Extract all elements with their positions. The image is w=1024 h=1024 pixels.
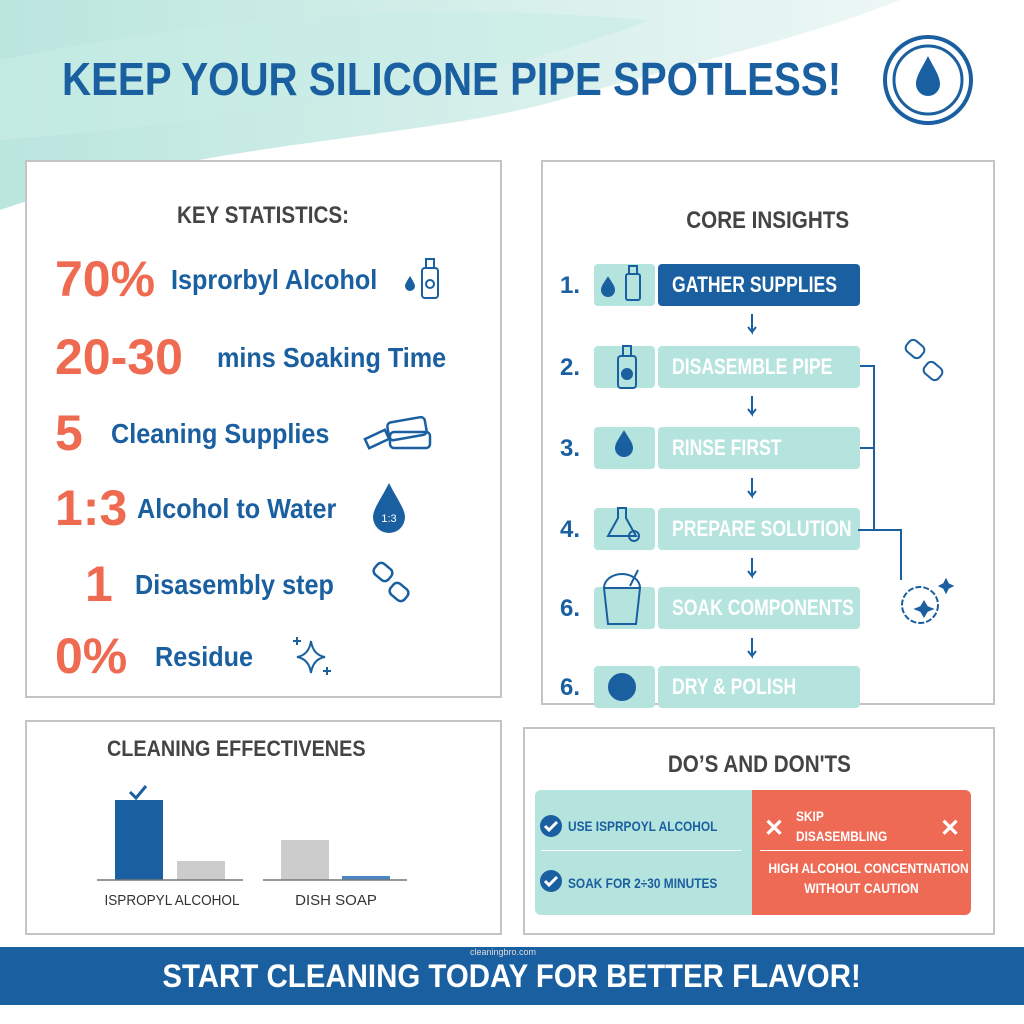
watermark: cleaningbro.com [470,947,536,957]
don'ts box: SKIP [796,808,824,824]
do's box [535,790,752,915]
background wave [0,0,900,210]
don'ts box: ✕ [764,815,784,842]
stat: 1:3: 1:3 [55,480,127,536]
don'ts box: HIGH ALCOHOL CONCENTNATION [768,860,969,876]
stat: 20-30: 20-30 [55,329,183,385]
stat: 5: 5 [55,405,83,461]
stat: 70%: Isprorbyl Alcohol [171,264,377,295]
don'ts box: WITHOUT CAUTION [804,880,919,896]
stat: 0% residue: 0% [55,628,127,684]
step 1: 1. [560,272,580,299]
don'ts box: DISASEMBLING [796,828,887,844]
footer banner [0,947,1024,1005]
step 5 [560,587,860,629]
don'ts box: ✕ [940,815,960,842]
step 4: 4. [560,516,580,543]
step 3: RINSE FIRST [672,435,782,460]
bar chart [97,785,407,909]
stat: 20-30: mins Soaking Time [217,342,446,373]
stat: 1:3: 1:3 [381,513,397,525]
step 2: DISASEMBLE PIPE [672,354,832,379]
stat: 1 disassembly [85,556,410,612]
do's box: USE ISPRPOYL ALCOHOL [568,818,717,834]
title: KEEP YOUR SILICONE PIPE SPOTLESS! [62,53,841,105]
bar chart: DISH SOAP [295,892,377,909]
panel: cleaning effectiveness chart [25,720,502,935]
stat: 0% residue [55,628,331,684]
don'ts box [752,790,971,915]
step 1 [560,264,860,306]
stat: 1:3: Alcohol to Water [137,493,336,524]
stat: 70% [55,251,439,307]
stat: 0% residue: Residue [155,641,253,672]
heading: key statistics: KEY STATISTICS: [177,202,349,229]
step 6: 6. [560,674,580,701]
panel: do's and don'ts [523,727,995,935]
step 4: PREPARE SOLUTION [672,516,852,541]
step 4 [560,508,860,550]
stat: 5: Cleaning Supplies [111,418,329,449]
step 6 [560,666,860,708]
step 3 [560,427,860,469]
stat: 20-30 [55,329,446,385]
bar chart: ISPROPYL ALCOHOL [104,892,240,909]
step icons and connectors [601,265,954,701]
footer banner: START CLEANING TODAY FOR BETTER FLAVOR! [163,958,861,994]
stat: 5 [55,405,432,461]
step 6: DRY & POLISH [672,674,796,699]
stat: 1 disassembly: Disasembly step [135,569,334,600]
heading: cleaning effectiveness: CLEANING EFFECTIVENES [107,736,366,761]
stat: 1 disassembly: 1 [85,556,113,612]
step 5: SOAK COMPONENTS [672,595,854,620]
stat: 1:3 [55,480,405,536]
panel: key statistics [25,160,502,698]
step 2: 2. [560,354,580,381]
stat: 70%: 70% [55,251,155,307]
heading: core insights: CORE INSIGHTS [687,207,849,234]
panel: core insights [541,160,995,705]
step 1: GATHER SUPPLIES [672,272,837,297]
step 5: 6. [560,595,580,622]
heading: do's and don'ts: DO’S AND DON'TS [667,751,851,778]
icon: water drop badge [883,35,973,125]
step 3: 3. [560,435,580,462]
step 2 [560,346,860,388]
do's box: SOAK FOR 2÷30 MINUTES [568,875,717,891]
